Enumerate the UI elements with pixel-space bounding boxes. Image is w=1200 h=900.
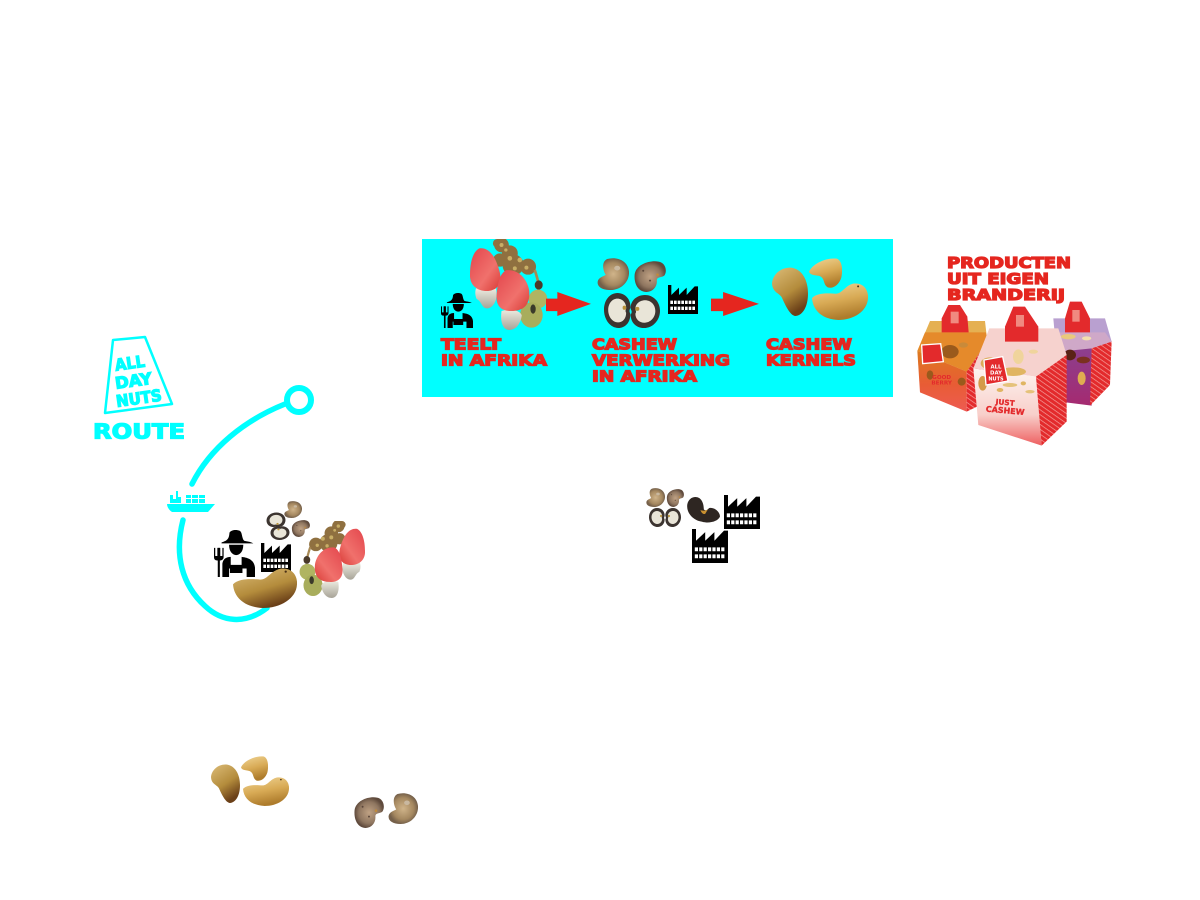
icon: factory: [261, 543, 291, 572]
icon: farmer: [214, 530, 255, 577]
icon: cashew apples: [300, 520, 365, 598]
box: orange: [917, 305, 987, 412]
box: orange: GOOD: [932, 375, 951, 381]
icon: raw cashews and shells: [646, 488, 684, 527]
panel: process strip: [422, 238, 893, 397]
text: cashew kernels: KERNELS: [766, 352, 856, 370]
text: cashew verwerking in Afrika: VERWERKING: [592, 352, 730, 370]
text: cashew verwerking in Afrika: IN AFRIKA: [592, 368, 697, 386]
icon: large kernel: [233, 568, 297, 608]
icon: kernels bottom: [211, 756, 289, 806]
step 3: cashew kernels: [766, 258, 868, 370]
arrow: step 1 to 2: [546, 292, 591, 316]
text: cashew kernels: CASHEW: [766, 336, 852, 354]
step 2: cashew verwerking: [592, 258, 730, 386]
arrow: step 2 to 3: [711, 292, 759, 316]
processing cluster: [646, 488, 760, 563]
icon: factory: [724, 495, 760, 529]
icon: roasted shell: [687, 497, 720, 522]
text: cashew verwerking in Afrika: CASHEW: [592, 336, 677, 354]
heading: producten uit eigen branderij: UIT EIGEN: [947, 270, 1049, 288]
icon: ship: [167, 491, 215, 512]
box: orange: BERRY: [931, 380, 953, 386]
icon: cashew kernels: [772, 258, 868, 320]
logo: all day nuts: [105, 337, 172, 413]
icon: cashew apples: [470, 238, 547, 330]
route cluster: farm and factory: [214, 501, 365, 608]
route start marker: [287, 388, 311, 412]
logo: all day nuts: DAY: [114, 369, 153, 393]
step 1: teelt in Afrika: [441, 238, 547, 370]
text: teelt in Afrika: TEELT: [441, 336, 502, 354]
icon: raw cashews bottom: [354, 793, 418, 828]
box: just cashew: ALL: [991, 364, 1002, 370]
icon: farmer: [441, 293, 473, 328]
box: just cashew: CASHEW: [986, 405, 1025, 417]
box: just cashew: DAY: [990, 370, 1002, 376]
icon: factory: [668, 285, 698, 314]
box: purple: [1053, 302, 1112, 406]
box: just cashew: JUST: [994, 397, 1015, 408]
icon: raw cashew and open shells: [598, 258, 666, 328]
text: teelt in Afrika: IN AFRIKA: [441, 352, 547, 370]
logo: all day nuts: ALL: [114, 352, 146, 375]
box: just cashew: NUTS: [988, 376, 1004, 382]
product boxes: [917, 302, 1112, 446]
heading: producten uit eigen branderij: BRANDERIJ: [947, 286, 1065, 304]
heading: producten uit eigen branderij: PRODUCTEN: [947, 254, 1071, 272]
box: just cashew: [973, 307, 1067, 446]
icon: raw cashews and shells: [266, 501, 310, 540]
route map line: [179, 404, 285, 619]
heading: route: ROUTE: [93, 420, 185, 444]
logo: all day nuts: NUTS: [115, 386, 163, 411]
icon: factory: [692, 529, 728, 563]
